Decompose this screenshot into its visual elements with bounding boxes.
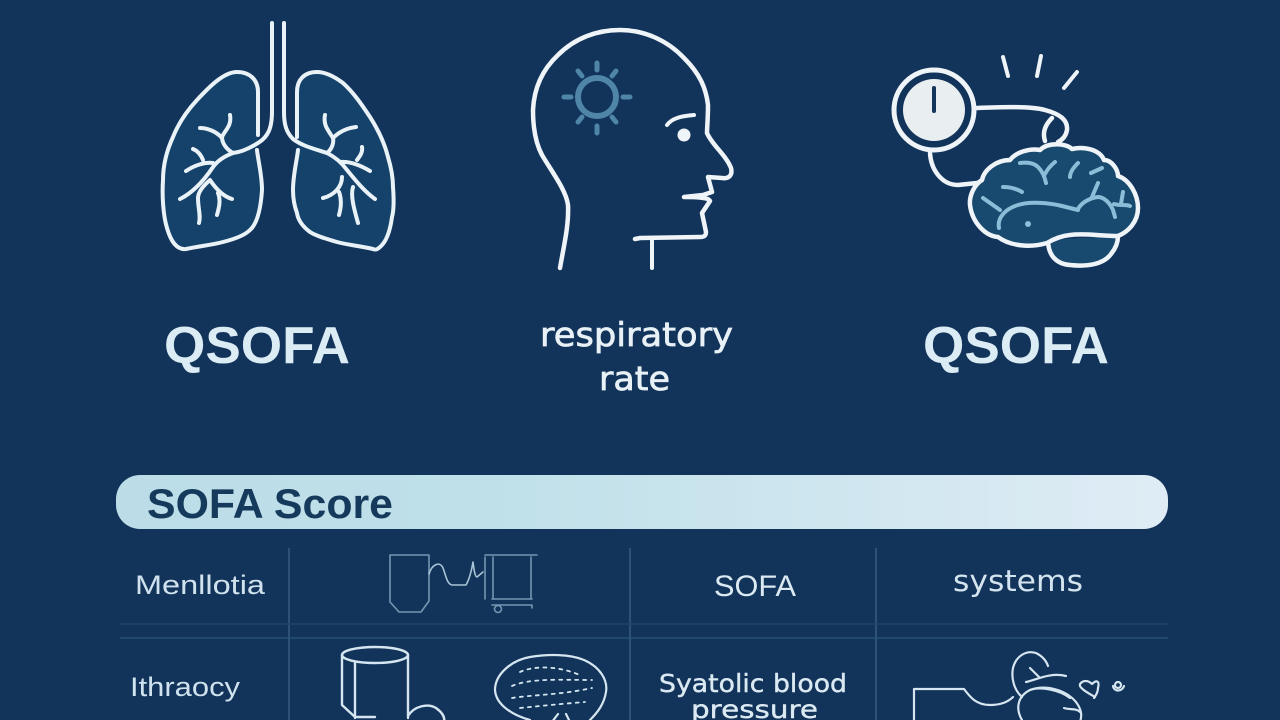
heading: QSOFA left: QSOFA	[164, 317, 350, 375]
icon: organ systems	[914, 652, 1124, 720]
icon: blood pressure gauge and brain	[894, 56, 1138, 266]
icon: head with sun	[533, 30, 731, 268]
icon: brain outline	[495, 655, 606, 720]
heading: QSOFA right: QSOFA	[923, 317, 1109, 375]
heading: respiratory rate	[540, 315, 733, 398]
signal ticks	[1003, 56, 1077, 88]
brain	[970, 144, 1138, 246]
cell label: systems: systems	[953, 564, 1083, 598]
cell label: Menllotia: Menllotia	[135, 570, 266, 600]
table: SOFA grid	[120, 548, 1168, 720]
icon: sun	[564, 63, 630, 133]
left bronchi	[180, 115, 233, 223]
cell label: Ithraocy: Ithraocy	[130, 672, 241, 702]
heading: respiratory rate: rate	[599, 359, 670, 398]
banner: SOFA Score: SOFA Score	[147, 480, 393, 527]
icon: lungs	[163, 23, 394, 250]
cerebellum	[1048, 236, 1118, 266]
cell label: SOFA: SOFA	[714, 570, 796, 603]
cell label: Systolic blood pressure: Syatolic blood	[659, 669, 847, 698]
banner: SOFA Score	[116, 475, 1168, 529]
gauge	[894, 70, 974, 150]
cell label: Systolic blood pressure	[659, 669, 847, 720]
icon: cup and monitor	[390, 555, 537, 612]
right bronchi	[323, 115, 375, 223]
heading: respiratory rate: respiratory	[540, 315, 733, 354]
tube	[930, 107, 1067, 185]
icon: cylinder	[342, 647, 444, 720]
